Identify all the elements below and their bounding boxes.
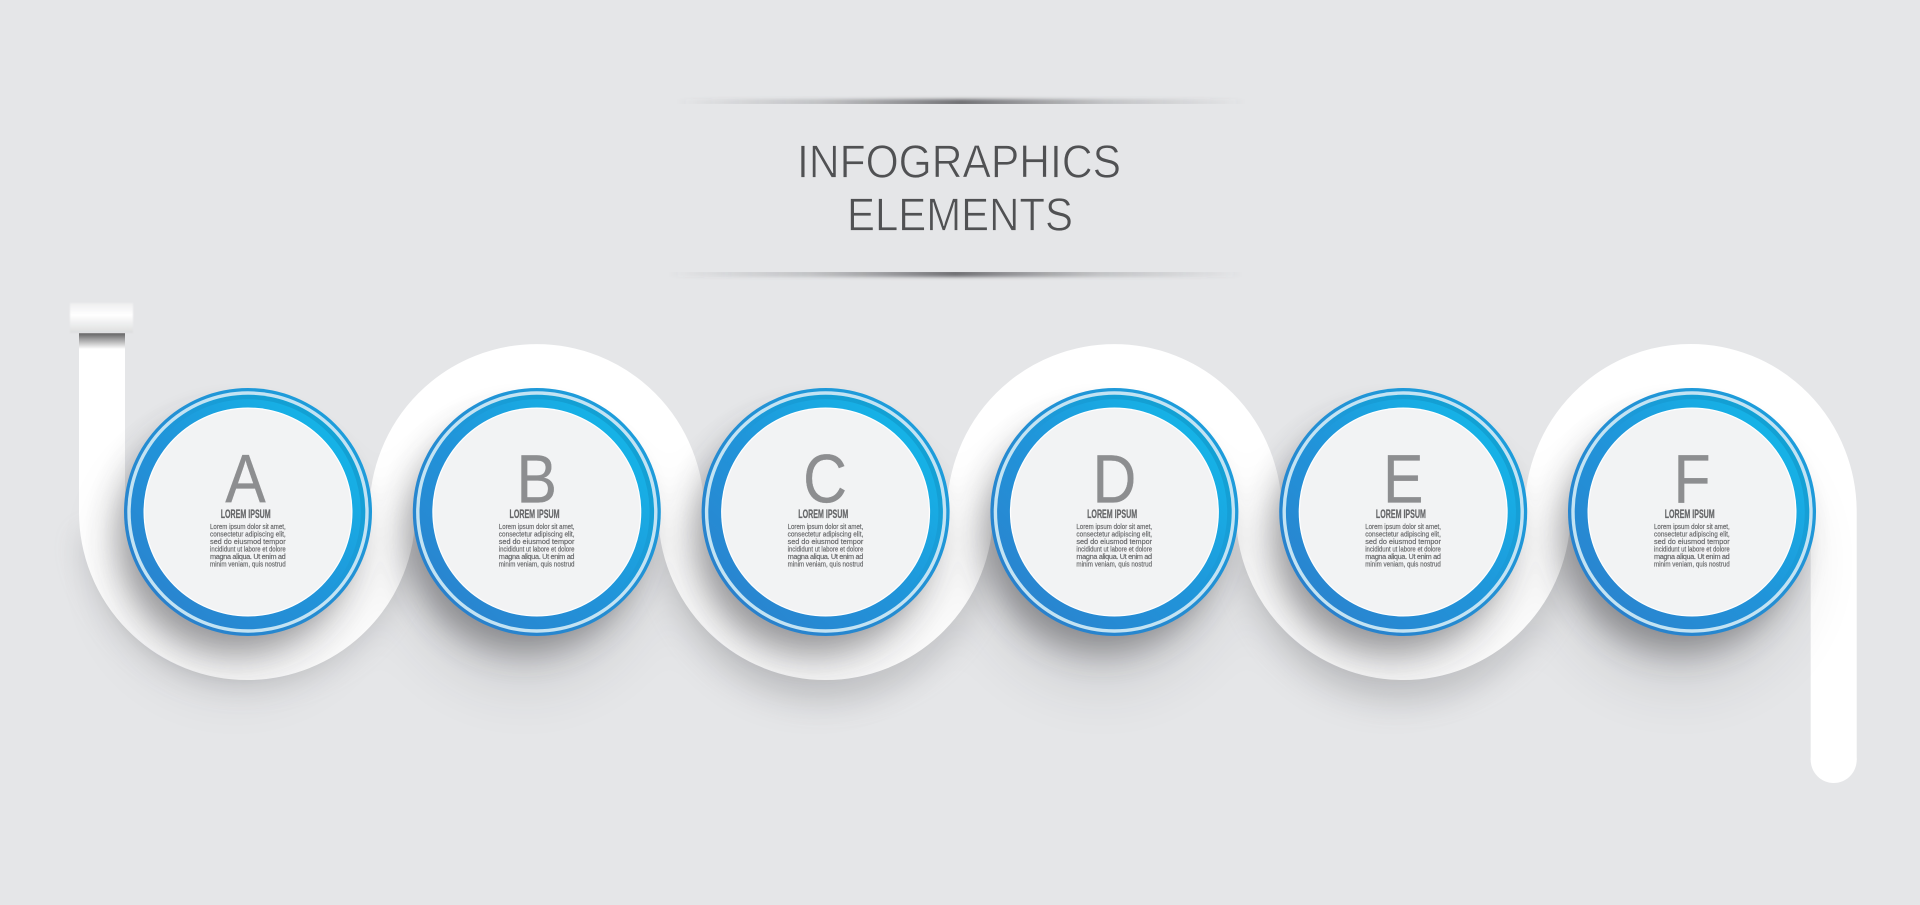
body text E: magna aliqua. Ut enim ad bbox=[1365, 552, 1441, 561]
body text D: consectetur adipiscing elit, bbox=[1076, 530, 1152, 539]
heading A: LOREM IPSUM bbox=[221, 507, 271, 521]
body text B: minim veniam, quis nostrud bbox=[499, 560, 574, 569]
title bbox=[797, 136, 1121, 240]
body text A: consectetur adipiscing elit, bbox=[210, 530, 286, 539]
body text C: magna aliqua. Ut enim ad bbox=[788, 552, 863, 561]
panel: circle B bbox=[413, 388, 661, 636]
white ribbon bbox=[102, 333, 1834, 760]
heading C: LOREM IPSUM bbox=[798, 507, 848, 521]
body text F: incididunt ut labore et dolore bbox=[1654, 545, 1730, 554]
body text F: sed do eiusmod tempor bbox=[1654, 537, 1730, 546]
body text E: consectetur adipiscing elit, bbox=[1365, 530, 1441, 539]
body text E: incididunt ut labore et dolore bbox=[1365, 545, 1441, 554]
panel: circle A bbox=[124, 388, 372, 636]
title: ELEMENTS bbox=[847, 188, 1073, 240]
body text A: minim veniam, quis nostrud bbox=[210, 560, 286, 569]
ribbon round end bbox=[1811, 737, 1857, 783]
heading D: LOREM IPSUM bbox=[1087, 507, 1137, 521]
body text B bbox=[499, 522, 575, 569]
letter D: D bbox=[1092, 440, 1136, 518]
top divider shadow bbox=[676, 99, 1246, 106]
body text A: Lorem ipsum dolor sit amet, bbox=[210, 522, 286, 531]
body text F: consectetur adipiscing elit, bbox=[1654, 530, 1730, 539]
body text F bbox=[1654, 522, 1730, 569]
letter E: E bbox=[1383, 440, 1423, 518]
body text E: sed do eiusmod tempor bbox=[1365, 537, 1441, 546]
body text C: incididunt ut labore et dolore bbox=[788, 545, 863, 554]
heading B: LOREM IPSUM bbox=[509, 507, 559, 521]
body text A: incididunt ut labore et dolore bbox=[210, 545, 286, 554]
body text D: magna aliqua. Ut enim ad bbox=[1076, 552, 1152, 561]
body text A bbox=[210, 522, 286, 569]
panel: circle E bbox=[1279, 388, 1527, 636]
body text A: magna aliqua. Ut enim ad bbox=[210, 552, 286, 561]
body text B: incididunt ut labore et dolore bbox=[499, 545, 574, 554]
letter C: C bbox=[803, 440, 847, 518]
body text D bbox=[1076, 522, 1153, 569]
ribbon top tab bbox=[70, 303, 133, 349]
body text A: sed do eiusmod tempor bbox=[210, 537, 286, 546]
body text B: Lorem ipsum dolor sit amet, bbox=[499, 522, 574, 531]
body text B: sed do eiusmod tempor bbox=[499, 537, 575, 546]
panel: circle F bbox=[1568, 388, 1816, 636]
heading F: LOREM IPSUM bbox=[1665, 507, 1715, 521]
heading E: LOREM IPSUM bbox=[1376, 507, 1426, 521]
body text C: sed do eiusmod tempor bbox=[788, 537, 864, 546]
body text F: magna aliqua. Ut enim ad bbox=[1654, 552, 1730, 561]
body text D: minim veniam, quis nostrud bbox=[1076, 560, 1152, 569]
body text D: sed do eiusmod tempor bbox=[1076, 537, 1153, 546]
body text E: Lorem ipsum dolor sit amet, bbox=[1365, 522, 1441, 531]
letter A: A bbox=[225, 440, 266, 518]
letter B: B bbox=[517, 440, 557, 518]
body text B: consectetur adipiscing elit, bbox=[499, 530, 574, 539]
body text D: incididunt ut labore et dolore bbox=[1076, 545, 1152, 554]
body text B: magna aliqua. Ut enim ad bbox=[499, 552, 574, 561]
body text C: minim veniam, quis nostrud bbox=[788, 560, 863, 569]
body text F: Lorem ipsum dolor sit amet, bbox=[1654, 522, 1730, 531]
panel: circle D bbox=[990, 388, 1238, 636]
letter F: F bbox=[1673, 440, 1711, 518]
bottom divider shadow bbox=[668, 270, 1243, 277]
body text E: minim veniam, quis nostrud bbox=[1365, 560, 1441, 569]
body text D: Lorem ipsum dolor sit amet, bbox=[1076, 522, 1152, 531]
ribbon soft shadow bbox=[102, 534, 1548, 679]
circle shadows bbox=[114, 416, 1802, 684]
panel: circle C bbox=[702, 388, 950, 636]
body text C: Lorem ipsum dolor sit amet, bbox=[788, 522, 863, 531]
body text C bbox=[788, 522, 864, 569]
body text F: minim veniam, quis nostrud bbox=[1654, 560, 1730, 569]
body text C: consectetur adipiscing elit, bbox=[788, 530, 863, 539]
title: INFOGRAPHICS bbox=[797, 136, 1121, 188]
body text E bbox=[1365, 522, 1441, 569]
